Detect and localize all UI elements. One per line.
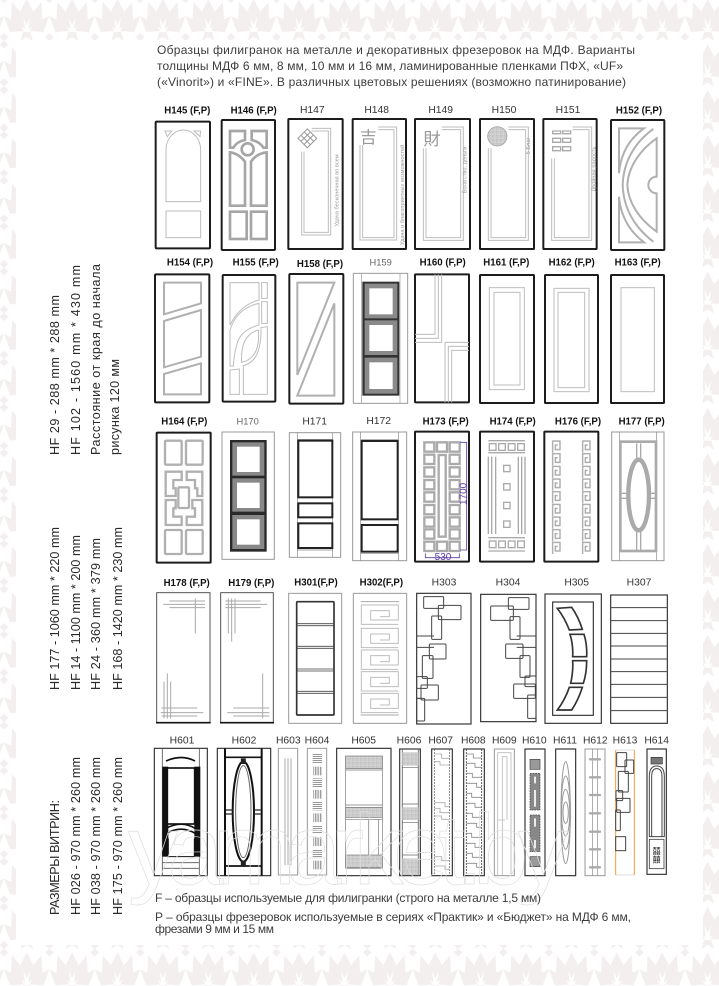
row 2 doors (155, 258, 664, 404)
door H148: 吉 (360, 128, 377, 147)
door H179: H179 (F,P) (228, 578, 274, 589)
intro text: толщины МДФ 6 мм, 8 мм, 10 мм и 16 мм, ламинированные пленками ПФХ, «UF» (157, 59, 623, 73)
door H612: H612 (583, 735, 608, 746)
door H176 (544, 417, 601, 562)
row 5 left doors (154, 735, 391, 876)
door H614: H614 (644, 735, 669, 746)
door H178 (156, 578, 211, 723)
door H613 (613, 735, 638, 875)
door H160 (415, 258, 469, 402)
door H609: H609 (492, 735, 517, 746)
door H150: 5 Благ (526, 137, 532, 154)
rotated size notes: HF 177 - 1060 mm * 220 mm (48, 527, 62, 690)
door H149: H149 (428, 105, 453, 116)
door H305: H305 (564, 577, 589, 588)
door H301: H301(F,P) (294, 577, 338, 588)
rotated size notes: HF 102 - 1560 mm * 430 mm (69, 265, 83, 455)
door H149: 財 (423, 129, 441, 149)
door H171: H171 (302, 417, 327, 428)
door H154 (155, 258, 213, 402)
door H172 (353, 416, 407, 561)
door H162 (545, 258, 598, 403)
door H146 (222, 106, 277, 250)
watermark: yamarket.by (128, 794, 568, 906)
door H170: H170 (237, 417, 259, 427)
door H154: H154 (F,P) (167, 258, 213, 269)
legend notes: фрезами 9 мм и 15 мм (155, 922, 274, 936)
door H611 (553, 735, 577, 876)
door H178: H178 (F,P) (164, 578, 210, 589)
door H160: H160 (F,P) (420, 258, 466, 269)
door H147 (288, 105, 343, 249)
door H301 (289, 577, 342, 723)
door H150: H150 (492, 105, 517, 116)
door H614: 囍 (653, 855, 661, 865)
door H155: H155 (F,P) (233, 258, 279, 269)
door H145 (156, 106, 210, 248)
door H147: Удача бесконечная во всем (334, 154, 340, 227)
door H152: H152 (F,P) (616, 106, 662, 117)
door H307 (611, 577, 667, 723)
rotated size notes: РАЗМЕРЫ ВИТРИН: (48, 800, 62, 915)
intro text: Образцы филигранок на металле и декоративных фрезеровок на МДФ. Варианты (157, 43, 635, 57)
door H145: H145 (F,P) (164, 106, 210, 117)
door H158 (289, 259, 343, 404)
door H159 (353, 258, 408, 403)
door H614 (644, 735, 669, 874)
door H162: H162 (F,P) (549, 258, 595, 269)
door H305 (545, 577, 601, 723)
rotated size notes: Расстояние от края до начала (89, 264, 103, 455)
door H152 (611, 106, 664, 250)
door H164: H164 (F,P) (161, 417, 207, 428)
door H149 (415, 105, 470, 249)
door H148: H148 (364, 105, 389, 116)
door H606 (397, 735, 422, 876)
door H174 (480, 417, 536, 562)
door H146: H146 (F,P) (231, 106, 277, 117)
door H605 (337, 735, 391, 876)
rotated size notes: HF 026 - 970 mm * 260 mm (69, 757, 83, 915)
door H171 (289, 417, 341, 557)
door H303: H303 (432, 577, 457, 588)
row 3 left doors (157, 416, 407, 563)
rotated size notes: HF 038 - 970 mm * 260 mm (89, 757, 103, 915)
door H606: H606 (397, 735, 422, 746)
door H612 (583, 735, 608, 876)
door H161: H161 (F,P) (483, 258, 529, 269)
intro text (157, 43, 635, 89)
door H179 (220, 578, 274, 723)
door H610: H610 (522, 735, 547, 746)
door H174: H174 (F,P) (490, 417, 536, 428)
door H607 (428, 735, 453, 876)
intro text: («Vinorit») и «FINE». В различных цветовых решениях (возможно патинирование) (157, 75, 626, 89)
door H151: Двойная радость (591, 147, 598, 192)
door H603 (276, 735, 301, 875)
row 5 right doors (397, 735, 669, 876)
door H158: H158 (F,P) (297, 259, 343, 270)
row 3 right doors (415, 417, 665, 563)
row 1 left doors (156, 105, 406, 250)
row 4 left doors (156, 577, 407, 723)
door H155 (223, 258, 279, 402)
legend notes: Р – образцы фрезеровок используемые в сериях «Практик» и «Бюджет» на МДФ 6 мм, (155, 910, 631, 924)
door H161 (480, 258, 534, 403)
door H151 (543, 105, 598, 249)
door H607: H607 (428, 735, 453, 746)
rotated size notes: HF 29 - 288 mm * 288 mm (48, 295, 62, 455)
door H604: H604 (305, 735, 330, 746)
door H614: 囍 (653, 846, 661, 856)
door H172: H172 (366, 416, 391, 427)
rotated size notes: HF 24 - 360 mm * 379 mm (89, 538, 103, 690)
door H173: 1700 (458, 482, 469, 505)
door H609 (492, 735, 517, 876)
door H304: H304 (496, 577, 521, 588)
rotated size notes: HF 175 - 970 mm * 260 mm (111, 757, 125, 915)
door H604 (305, 735, 330, 875)
door H150 (480, 105, 534, 249)
door H601 (154, 735, 207, 876)
rotated size notes: HF 168 - 1420 mm * 230 mm (111, 527, 125, 690)
door H163 (611, 258, 664, 403)
legend notes (155, 891, 631, 936)
row 1 right doors (415, 105, 664, 250)
door H170 (222, 417, 274, 559)
door H177: H177 (F,P) (619, 417, 665, 428)
door H164 (157, 417, 211, 563)
row 4 right doors (417, 577, 667, 724)
door H304 (481, 577, 536, 722)
door H302: H302(F,P) (360, 577, 403, 588)
door H151: H151 (556, 105, 581, 116)
door H613: H613 (613, 735, 638, 746)
door H147: H147 (300, 105, 325, 116)
door H608: H608 (461, 735, 486, 746)
door H602 (217, 735, 271, 876)
rotated size notes: HF 14 - 1100 mm * 200 mm (69, 535, 83, 690)
door H159: H159 (370, 258, 392, 268)
door H608 (461, 735, 486, 876)
door H605: H605 (351, 735, 376, 746)
door H148: Удача и благоприятных возможностей (399, 145, 406, 245)
legend notes: F – образцы используемые для филигранки (строго на металле 1,5 мм) (155, 891, 541, 905)
door H173: H173 (F,P) (423, 417, 469, 428)
door H602: H602 (232, 735, 257, 746)
door H611: H611 (553, 735, 577, 746)
door H603: H603 (276, 735, 301, 746)
door H177 (612, 417, 665, 561)
door H303 (417, 577, 471, 724)
door H173 (415, 417, 469, 563)
door H610 (522, 735, 547, 876)
door H173: 530 (435, 552, 452, 563)
door H148 (353, 105, 406, 249)
door H163: H163 (F,P) (615, 258, 661, 269)
door H176: H176 (F,P) (555, 417, 601, 428)
door H302 (353, 577, 407, 723)
door H307: H307 (627, 577, 652, 588)
door H601: H601 (170, 735, 195, 746)
rotated size notes (48, 264, 125, 915)
door H149: Богатство, деньги (463, 147, 469, 193)
rotated size notes: рисунка 120 мм (108, 359, 122, 455)
